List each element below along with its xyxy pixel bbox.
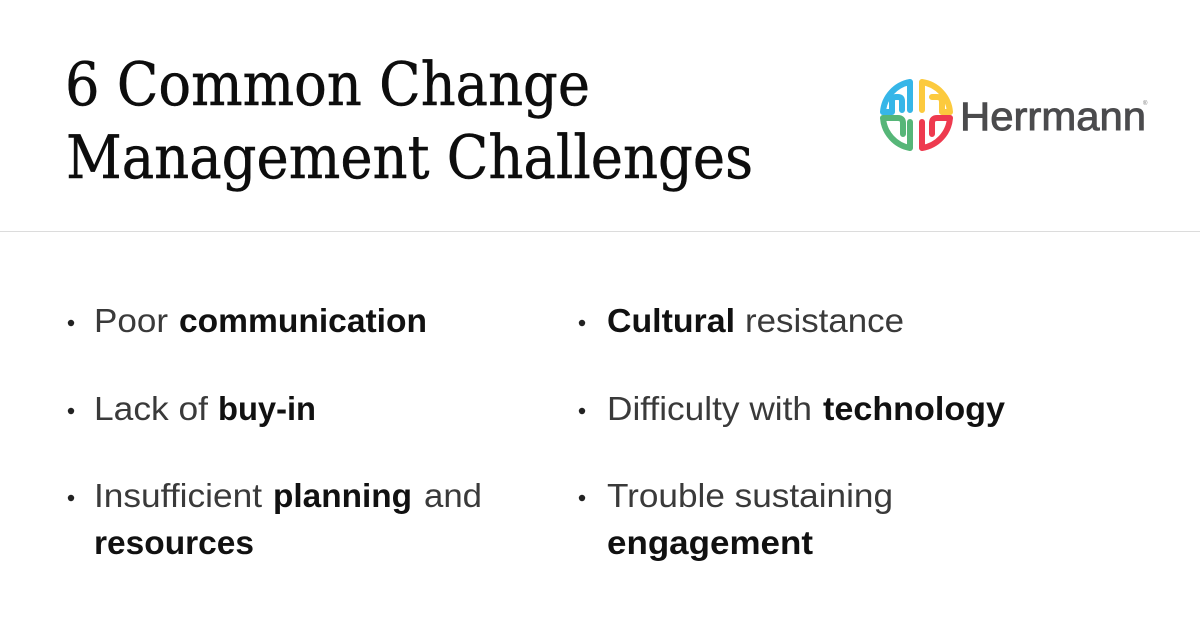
item: Trouble sustaining engagement: [579, 477, 893, 561]
list: left column: [68, 302, 482, 561]
wordmark: Herrmann: [960, 95, 1146, 139]
item: Trouble sustaining engagement: Trouble sustaining: [607, 477, 893, 514]
title: [65, 50, 753, 193]
item: Difficulty with technology: Difficulty with: [607, 390, 812, 427]
title: Management Challenges: [66, 123, 753, 193]
icon: knot emblem: [883, 82, 950, 148]
item: Poor communication: communication: [179, 302, 427, 339]
item: Insufficient planning and resources: and: [424, 477, 482, 514]
item: Trouble sustaining engagement: engagement: [607, 524, 813, 561]
item: Cultural resistance: resistance: [745, 302, 904, 339]
item: Difficulty with technology: technology: [823, 390, 1006, 427]
registered mark: ®: [1143, 100, 1148, 107]
item: Lack of buy-in: buy-in: [218, 390, 316, 427]
item: Lack of buy-in: [68, 390, 316, 427]
item: Poor communication: Poor: [94, 302, 168, 339]
item: Lack of buy-in: Lack of: [94, 390, 209, 427]
item: Cultural resistance: [579, 302, 904, 339]
item: Insufficient planning and resources: [68, 477, 482, 561]
list: right column: [579, 302, 1006, 561]
item: Insufficient planning and resources: resources: [94, 524, 254, 561]
title: 6 Common Change: [65, 50, 590, 120]
logo: Herrmann: [883, 82, 1148, 148]
item: Cultural resistance: Cultural: [607, 302, 735, 339]
item: Insufficient planning and resources: Insufficient: [94, 477, 262, 514]
item: Difficulty with technology: [579, 390, 1006, 427]
item: Insufficient planning and resources: planning: [273, 477, 412, 514]
item: Poor communication: [68, 302, 427, 339]
